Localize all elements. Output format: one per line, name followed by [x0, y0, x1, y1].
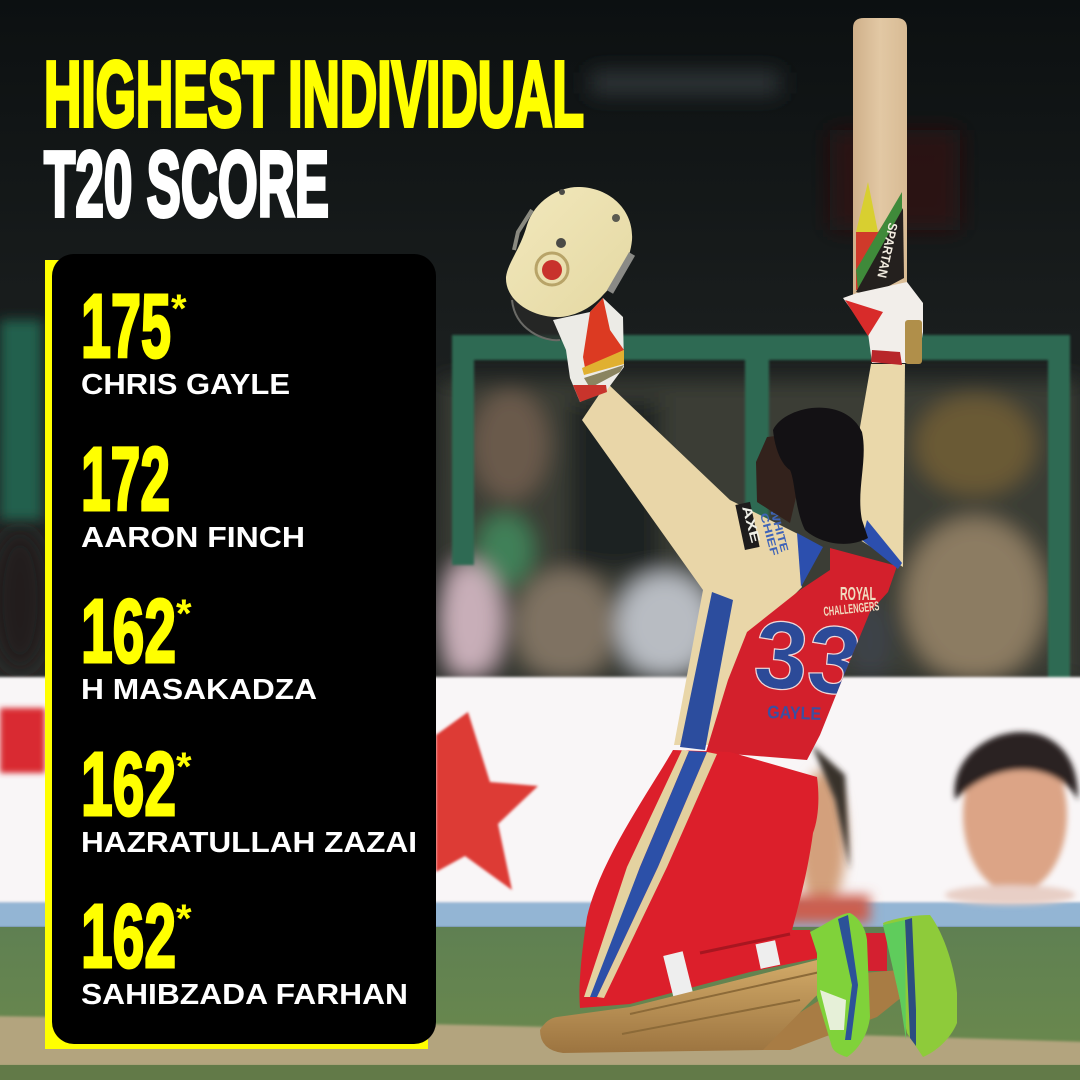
- jersey: WHITE: [767, 508, 790, 553]
- entry: 162 H Masakadza: 162: [81, 582, 176, 682]
- player: Chris Gayle celebrating: [506, 18, 957, 1057]
- entry: 162 H Masakadza: H MASAKADZA: [81, 674, 317, 706]
- title: [44, 42, 584, 236]
- jersey: [680, 502, 919, 760]
- entry: 162 Hazratullah Zazai: HAZRATULLAH ZAZAI: [81, 827, 417, 859]
- entry: 162 Hazratullah Zazai: *: [176, 745, 192, 789]
- advertising board: [0, 677, 1080, 928]
- title: T20 SCORE: [44, 132, 329, 236]
- entry: 162 Sahibzada Farhan: *: [176, 897, 192, 941]
- leg pads: [540, 960, 907, 1053]
- raised right arm: [857, 364, 905, 567]
- grass and pitch: [0, 927, 1080, 1080]
- board portrait: [945, 732, 1078, 905]
- jersey logo: ROYAL: [840, 584, 876, 604]
- bat: SPARTAN: [874, 221, 901, 279]
- entry: 162 Sahibzada Farhan: 162: [81, 887, 176, 987]
- right glove: [843, 282, 923, 365]
- left glove: [553, 298, 624, 402]
- entry: 162 Hazratullah Zazai: 162: [81, 735, 176, 835]
- entry: 175 Chris Gayle: [81, 277, 290, 401]
- jersey number: 333: [750, 600, 919, 721]
- entry: 172 Aaron Finch: AARON FINCH: [81, 522, 305, 554]
- trousers: [579, 750, 887, 1008]
- bat: [853, 18, 907, 296]
- jersey: CHALLENGERS: [823, 598, 880, 619]
- green shoes: [810, 913, 957, 1057]
- entry: 175 Chris Gayle: 175: [81, 277, 171, 377]
- entry: 175 Chris Gayle: *: [171, 287, 187, 331]
- jersey name: GAYLE: [767, 702, 822, 724]
- entry: 162 H Masakadza: [81, 582, 317, 706]
- entry: 162 H Masakadza: *: [176, 592, 192, 636]
- green railing: [452, 335, 1070, 680]
- entry: 162 Hazratullah Zazai: [81, 735, 417, 859]
- entry: 175 Chris Gayle: CHRIS GAYLE: [81, 369, 290, 401]
- panel: scores list: [45, 254, 436, 1049]
- sleeve sponsors: [735, 502, 760, 550]
- raised left arm: [582, 383, 802, 745]
- jersey: AXE: [739, 504, 764, 545]
- jersey: CHIEF: [757, 512, 780, 558]
- helmet with grille: [506, 187, 632, 341]
- head and bandana: [756, 408, 868, 544]
- entry: 162 Sahibzada Farhan: [81, 887, 408, 1011]
- title: HIGHEST INDIVIDUAL: [44, 42, 584, 146]
- entry: 172 Aaron Finch: 172: [81, 430, 170, 530]
- entry: 172 Aaron Finch: [81, 430, 305, 554]
- entry: 162 Sahibzada Farhan: SAHIBZADA FARHAN: [81, 979, 408, 1011]
